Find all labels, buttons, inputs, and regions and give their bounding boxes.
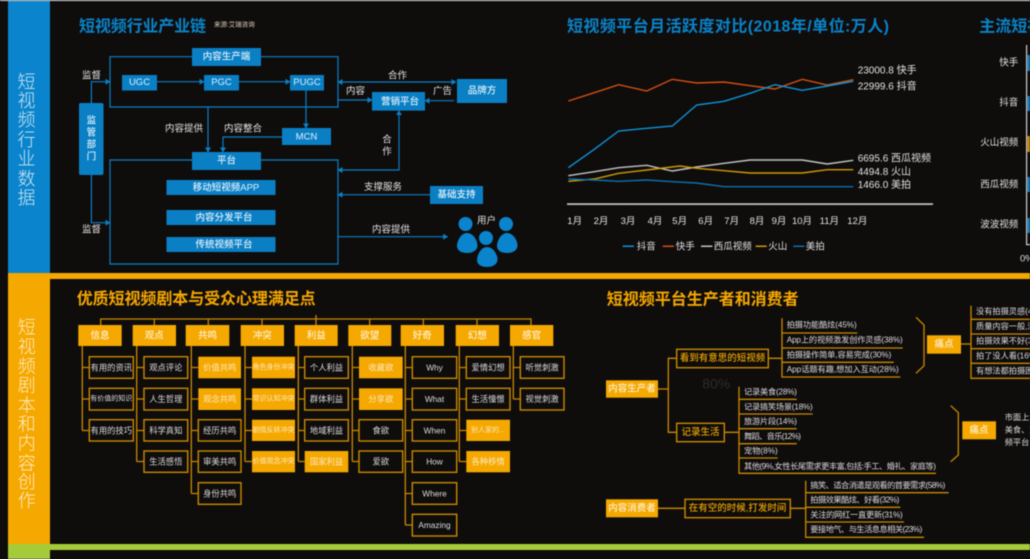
list: motivations: App上的视频激发创作灵感(38%) xyxy=(787,334,903,344)
column: conflict: 常识认知冲突 xyxy=(252,394,294,402)
box: MCN xyxy=(282,128,331,145)
connector labels: 内容提供 xyxy=(372,224,411,236)
box: traditional video: 传统视频平台 xyxy=(195,238,253,250)
column: resonance: 价值共鸣 xyxy=(203,362,236,372)
column: desire: 收藏欲 xyxy=(368,362,393,372)
panel: quality script tree xyxy=(77,289,564,536)
series: meipai xyxy=(568,179,853,187)
month labels: 8月 xyxy=(750,216,764,227)
column: curiosity: Amazing xyxy=(418,520,451,530)
column: opinion: 观点 xyxy=(145,330,164,342)
column: information: 信息 xyxy=(90,330,110,342)
column: fantasy xyxy=(456,325,510,472)
series: xigua xyxy=(568,160,853,176)
connector labels: 监督 xyxy=(82,224,101,236)
connector labels: 支撑服务 xyxy=(364,181,403,193)
list: consumer needs: 拍摄效果酷炫、好看(32%) xyxy=(810,494,900,504)
month labels xyxy=(567,216,867,227)
column: resonance: 经历共鸣 xyxy=(203,426,236,436)
box: regulator xyxy=(79,103,104,175)
column: benefit xyxy=(295,325,348,472)
legend: 抖音 xyxy=(637,240,656,252)
section band: industry data xyxy=(8,1,50,273)
box: regulator: 管 xyxy=(87,126,96,138)
section band: script and content creation: 内 xyxy=(18,434,36,454)
column: opinion: 科学真知 xyxy=(149,426,182,436)
column: curiosity: What xyxy=(425,394,445,404)
column: opinion xyxy=(133,325,188,472)
column: curiosity xyxy=(401,325,457,536)
list: recorded topics: 宠物(8%) xyxy=(744,446,778,456)
heading: quality script: 优质短视频剧本与受众心理满足点 xyxy=(77,289,316,308)
box: brand xyxy=(457,79,507,103)
box: infrastructure: 基础支持 xyxy=(437,188,476,200)
column: curiosity: How xyxy=(426,456,444,466)
section band: industry data: 行 xyxy=(18,130,36,150)
column: desire: 欲望 xyxy=(360,330,379,342)
watermark 80%: 80% xyxy=(702,375,730,391)
column: opinion: 观点评论 xyxy=(149,362,183,372)
month labels: 9月 xyxy=(772,216,786,227)
month labels: 3月 xyxy=(621,216,635,227)
column: opinion: 人生哲理 xyxy=(149,394,183,404)
box: regulator: 监 xyxy=(87,114,97,126)
section band: script and content creation: 剧 xyxy=(18,375,36,395)
connector labels: 合 xyxy=(382,134,392,146)
month labels: 7月 xyxy=(724,216,739,227)
panel: producers and consumers xyxy=(606,289,1030,537)
column: senses xyxy=(510,325,564,410)
column: fantasy: 幻想 xyxy=(468,330,487,342)
column: information: 有价值的知识 xyxy=(90,394,132,402)
list: recorded topics: 其他(9%,女性长尾需求更丰富,包括:手工、婚礼、家庭等) xyxy=(744,461,936,471)
legend: 西瓜视频 xyxy=(714,240,752,252)
section band: script and content creation: 创 xyxy=(18,472,36,492)
column: conflict xyxy=(241,325,295,472)
box: PUGC: PUGC xyxy=(293,77,321,88)
box: pain points lower: 痛点 xyxy=(969,424,989,436)
series: douyin xyxy=(568,81,853,168)
month labels: 12月 xyxy=(847,216,867,227)
column: desire: 分享欲 xyxy=(368,394,393,404)
column: conflict: 冲突 xyxy=(253,330,272,342)
panel: mainstream platforms bar chart xyxy=(979,16,1030,264)
text: market note: 频平台 xyxy=(1005,437,1029,447)
connector labels: 内容 xyxy=(346,85,366,97)
box: mobile short video app: 移动短视频APP xyxy=(193,182,259,194)
column: resonance xyxy=(186,325,241,504)
section band: script and content creation: 容 xyxy=(18,453,36,473)
chart end labels: 4494.8 火山 xyxy=(858,166,911,178)
heading: monthly active users: 短视频平台月活跃度对比(2018年/单位:万人) xyxy=(567,16,889,36)
list: motivations: 拍摄功能酷炫(45%) xyxy=(787,320,857,330)
chart end labels: 6695.6 西瓜视频 xyxy=(858,152,931,164)
box: watch interesting videos: 看到有意思的短视频 xyxy=(680,352,766,364)
section band: industry data: 视 xyxy=(18,91,36,111)
section band: script and content creation: 作 xyxy=(18,491,36,511)
month labels: 6月 xyxy=(698,216,713,227)
month labels: 5月 xyxy=(672,216,687,227)
column: curiosity: Where xyxy=(422,488,447,498)
column: information: 有用的技巧 xyxy=(91,426,132,436)
box: watch interesting videos xyxy=(677,349,768,368)
column: benefit: 国家利益 xyxy=(310,456,343,466)
bar chart: 抖音 xyxy=(999,96,1018,108)
panel: monthly active users chart xyxy=(567,16,933,252)
box: platform xyxy=(192,152,261,170)
box: pain points lower xyxy=(962,421,996,439)
month labels: 2月 xyxy=(594,216,608,227)
box: mobile short video app xyxy=(166,180,276,195)
list: consumer needs: 要接地气、与生活息息相关(23%) xyxy=(810,524,923,534)
connector labels: 内容提供 xyxy=(165,122,204,134)
connector labels: 合作 xyxy=(388,70,408,82)
box: UGC: UGC xyxy=(129,77,150,88)
legend: 火山 xyxy=(768,242,787,252)
connector labels: 监督 xyxy=(82,70,101,82)
section band: script and content creation: 短 xyxy=(18,318,36,338)
box: pain points upper: 痛点 xyxy=(934,338,954,350)
box: content distribution: 内容分发平台 xyxy=(195,212,253,224)
column: opinion: 生活感悟 xyxy=(149,456,182,466)
column: curiosity: When xyxy=(424,426,446,436)
legend xyxy=(623,240,825,252)
box: PGC xyxy=(204,75,239,90)
month labels: 4月 xyxy=(648,216,662,227)
column: desire xyxy=(348,325,403,472)
list: motivations xyxy=(787,320,903,374)
box: marketing platform xyxy=(372,92,425,111)
box: UGC xyxy=(122,75,157,90)
section band: green xyxy=(8,544,1030,559)
column: senses: 感官 xyxy=(522,330,541,342)
section band: industry data: 短 xyxy=(18,72,36,92)
source note: 来源:艾瑞咨询 xyxy=(214,20,255,28)
section band: script and content creation: 本 xyxy=(18,395,36,415)
month labels: 10月 xyxy=(792,216,812,227)
list: motivations: App话题有趣,想加入互动(28%) xyxy=(787,364,899,374)
series: kuaishou xyxy=(568,79,853,101)
box: regulator: 门 xyxy=(87,150,96,162)
bar chart: 火山视频 xyxy=(980,136,1019,148)
box: pain points upper xyxy=(927,335,961,354)
box: content producer xyxy=(606,380,658,398)
list: consumer needs xyxy=(810,480,946,534)
connector labels xyxy=(82,70,452,236)
bar chart: 西瓜视频 xyxy=(980,178,1019,190)
chart end labels: 22999.6 抖音 xyxy=(858,80,917,92)
box: MCN: MCN xyxy=(296,132,317,142)
connector labels: 作 xyxy=(382,146,392,158)
list: recorded topics xyxy=(744,386,936,471)
box: content distribution xyxy=(166,210,276,225)
icon: users xyxy=(457,214,518,267)
month labels: 11月 xyxy=(820,216,839,227)
icon: users: 用户 xyxy=(477,214,496,226)
section band: industry data: 频 xyxy=(18,110,36,130)
column: benefit: 个人利益 xyxy=(310,362,343,372)
list: motivations: 拍摄操作简单,容易完成(30%) xyxy=(787,350,892,360)
text: market note xyxy=(1005,412,1030,447)
heading: producers and consumers: 短视频平台生产者和消费者 xyxy=(607,289,799,308)
column: fantasy: 生活憧憬 xyxy=(471,394,505,404)
column: benefit: 群体利益 xyxy=(310,394,343,404)
box: regulator: 部 xyxy=(87,138,97,150)
box: brand: 品牌方 xyxy=(468,84,496,96)
heading: industry chain: 短视频行业产业链 xyxy=(79,16,206,36)
month labels: 1月 xyxy=(567,216,582,227)
bar chart xyxy=(980,45,1030,264)
column: conflict: 价值观念冲突 xyxy=(252,456,294,465)
list: recorded topics: 记录美食(28%) xyxy=(744,386,797,396)
column: resonance: 审美共鸣 xyxy=(203,456,236,466)
column: fantasy: 别人家的... xyxy=(471,425,505,434)
list: recorded topics: 记录搞笑场景(18%) xyxy=(744,402,813,412)
column: senses: 听觉刺激 xyxy=(525,362,559,372)
section band: industry data: 业 xyxy=(18,149,36,169)
box: content producer: 内容生产者 xyxy=(608,382,656,394)
connector labels: 广告 xyxy=(433,85,452,97)
box: content consumer: 内容消费者 xyxy=(608,502,656,514)
box: content production: 内容生产端 xyxy=(203,50,251,62)
consumer connectors xyxy=(658,481,949,537)
box: marketing platform: 营销平台 xyxy=(381,96,419,108)
column: resonance: 身份共鸣 xyxy=(203,488,236,498)
box: platform: 平台 xyxy=(217,154,236,166)
column: desire: 食欲 xyxy=(372,426,389,436)
chart end labels xyxy=(858,64,931,191)
box: content consumer xyxy=(606,499,658,517)
box: kill time: 在有空的时候,打发时间 xyxy=(689,502,786,514)
column: curiosity: Why xyxy=(426,362,444,372)
chart end labels: 23000.8 快手 xyxy=(858,64,917,76)
bar chart: 波波视频 xyxy=(980,218,1019,230)
column: fantasy: 爱情幻想 xyxy=(471,362,505,372)
list: pain points upper xyxy=(976,306,1030,376)
chart end labels: 1466.0 美拍 xyxy=(858,178,911,191)
section band: script and content creation xyxy=(8,273,1030,544)
line chart xyxy=(568,79,853,187)
section band: script and content creation: 和 xyxy=(18,414,36,434)
box: record life xyxy=(677,423,724,442)
list: consumer needs: 搞笑、适合消遣是观看的首要需求(58%) xyxy=(810,480,946,490)
box: traditional video xyxy=(166,237,276,252)
pain point connectors xyxy=(961,306,1030,378)
bracket: upper xyxy=(916,317,924,373)
column: desire: 爱欲 xyxy=(372,456,389,466)
box: content production xyxy=(192,48,261,66)
column: conflict: 剧情反转冲突 xyxy=(252,425,294,434)
box: record life: 记录生活 xyxy=(681,426,720,438)
column: information: 有用的资讯 xyxy=(91,362,133,372)
section band: industry data: 数 xyxy=(18,169,36,189)
box: kill time xyxy=(685,499,790,518)
bar chart: 快手 xyxy=(999,56,1019,68)
box: PGC: PGC xyxy=(211,77,232,88)
column: resonance: 观念共鸣 xyxy=(203,394,236,404)
list: consumer needs: 关注的网红一直更新(31%) xyxy=(810,510,903,520)
column: benefit: 地域利益 xyxy=(310,426,343,436)
column: benefit: 利益 xyxy=(307,330,326,342)
panel: industry chain xyxy=(79,16,518,267)
legend: 美拍 xyxy=(806,240,825,252)
legend: 快手 xyxy=(676,240,695,252)
section band: script and content creation: 频 xyxy=(18,357,36,377)
connectors xyxy=(91,57,456,264)
list: recorded topics: 旅游片段(14%) xyxy=(744,416,797,426)
bracket: lower xyxy=(951,406,958,462)
column: curiosity: 好奇 xyxy=(413,330,432,342)
column: fantasy: 各种移情 xyxy=(471,456,505,466)
section band: industry data: 据 xyxy=(18,188,36,208)
chart axis xyxy=(567,203,933,205)
list: recorded topics: 舞蹈、音乐(12%) xyxy=(744,431,801,441)
producer connectors xyxy=(658,318,936,473)
column: senses: 视觉刺激 xyxy=(525,394,559,404)
column: information xyxy=(78,325,133,441)
tree top connector xyxy=(101,315,531,325)
box: PUGC xyxy=(290,75,324,90)
column: conflict: 角色身份冲突 xyxy=(252,362,294,371)
section band: script and content creation: 视 xyxy=(18,337,36,357)
series: huoshan xyxy=(568,166,853,181)
box: infrastructure xyxy=(430,186,483,204)
connector labels: 内容整合 xyxy=(224,122,263,134)
column: resonance: 共鸣 xyxy=(198,330,217,342)
